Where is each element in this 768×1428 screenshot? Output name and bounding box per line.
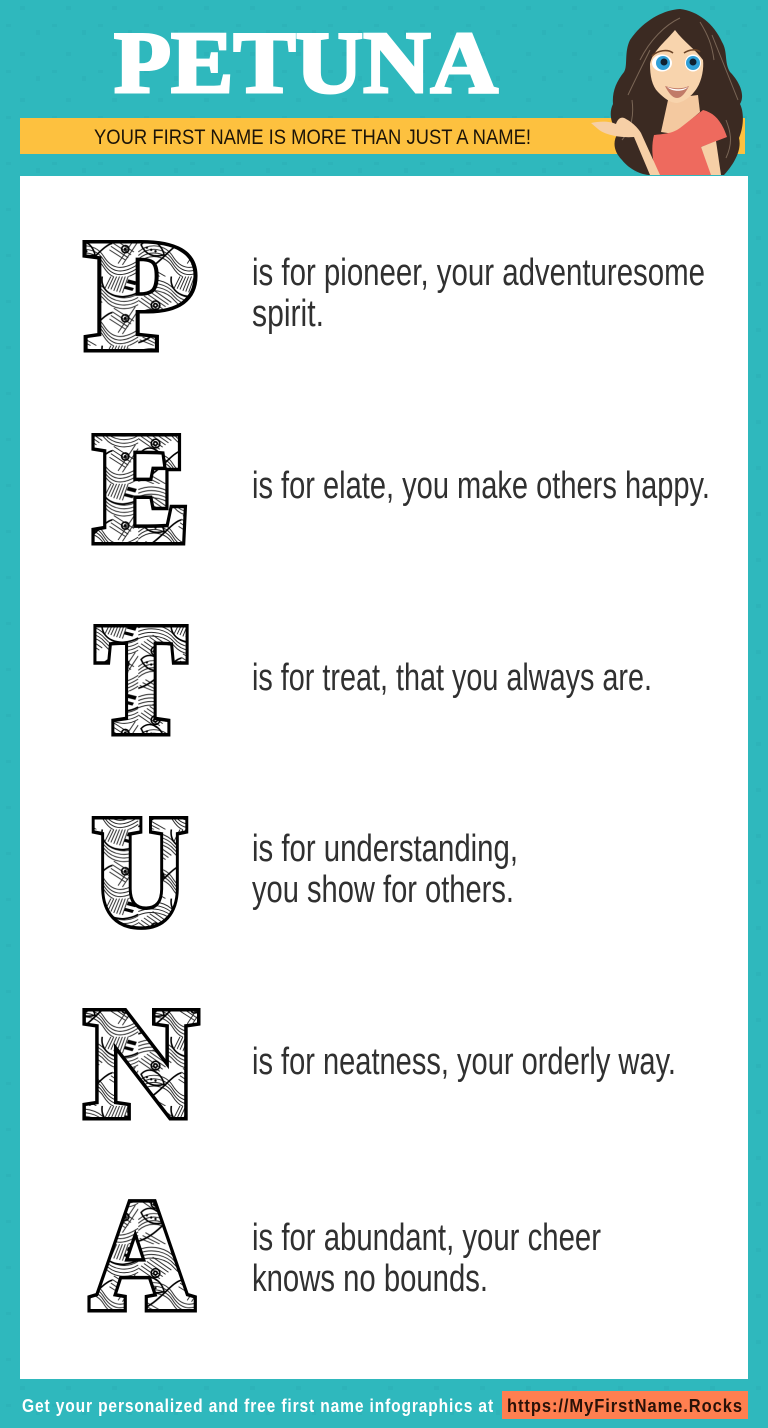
letter A: A xyxy=(92,1171,192,1339)
tagline banner: YOUR FIRST NAME IS MORE THAN JUST A NAME! xyxy=(94,126,531,149)
text A: knows no bounds. xyxy=(252,1258,488,1300)
letter A row xyxy=(92,1171,601,1339)
text A: is for abundant, your cheer xyxy=(252,1217,601,1259)
tagline banner xyxy=(20,118,745,154)
letter T row xyxy=(97,595,652,763)
letter N row xyxy=(86,979,676,1147)
text P: spirit. xyxy=(252,293,324,335)
letter N: N xyxy=(86,979,196,1147)
letter T: T xyxy=(97,595,185,763)
letter P: P xyxy=(87,211,195,379)
hair xyxy=(611,9,743,175)
face xyxy=(650,30,703,103)
letter E: E xyxy=(95,404,188,572)
footer xyxy=(22,1391,748,1419)
text P xyxy=(252,252,705,335)
footer text: Get your personalized and free first name infographics at xyxy=(22,1396,494,1416)
arm xyxy=(591,118,660,175)
letter T: T xyxy=(97,595,185,763)
footer url badge xyxy=(502,1391,748,1419)
eyes xyxy=(652,50,701,72)
letter N: N xyxy=(86,979,196,1147)
shirt xyxy=(652,110,727,175)
neck and chest xyxy=(661,95,700,134)
letter U: U xyxy=(94,787,186,955)
footer url badge: https://MyFirstName.Rocks xyxy=(507,1396,743,1416)
letter E row xyxy=(95,404,710,572)
letter U row xyxy=(94,787,518,955)
title: PETUNA xyxy=(114,15,498,112)
icon: cartoon woman xyxy=(591,9,743,175)
other arm xyxy=(701,141,721,175)
letter P row xyxy=(87,211,705,379)
main white panel xyxy=(20,176,748,1379)
mouth xyxy=(665,86,689,98)
text T: is for treat, that you always are. xyxy=(252,657,652,699)
letter A: A xyxy=(92,1171,192,1339)
letter U: U xyxy=(94,787,186,955)
letter E: E xyxy=(95,404,188,572)
text U: you show for others. xyxy=(252,869,514,911)
text A xyxy=(252,1217,601,1300)
text U xyxy=(252,828,518,911)
text U: is for understanding, xyxy=(252,828,518,870)
letter P: P xyxy=(87,211,195,379)
